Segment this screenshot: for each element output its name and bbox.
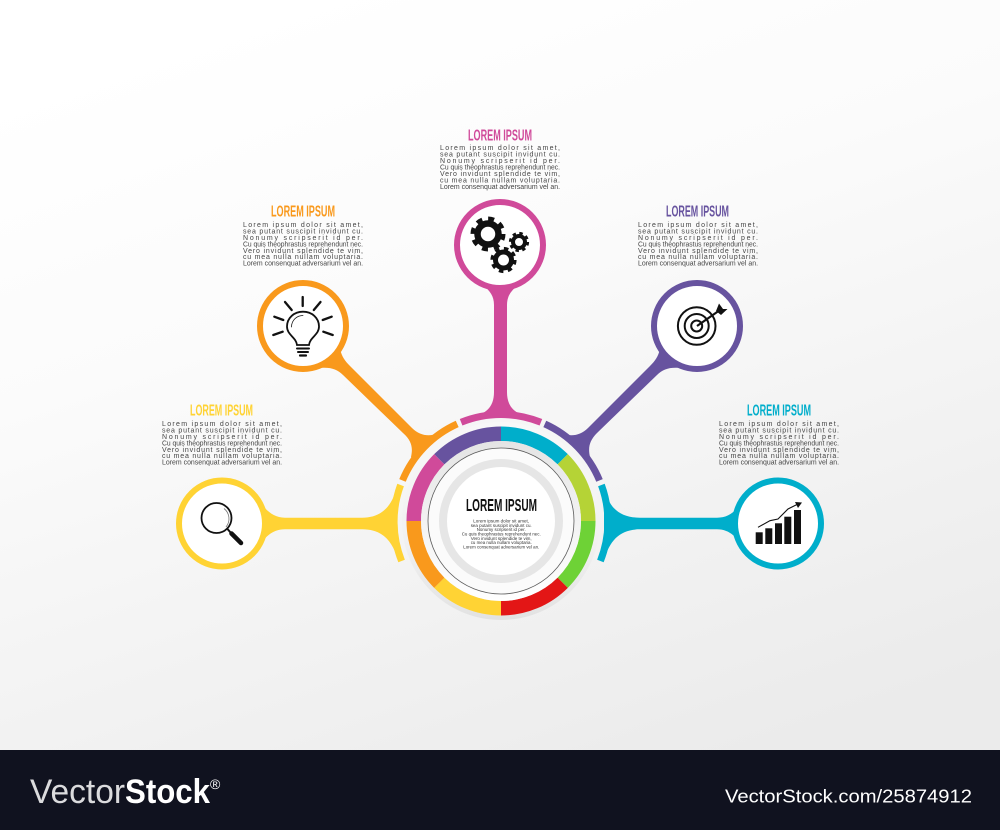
chart arrow [758,502,802,527]
heading: orange: LOREM IPSUM [271,204,335,220]
node circle: yellow [179,480,265,566]
hub outer disc [402,422,600,620]
text block: yellow: Lorem ipsum dolor sit amet, [162,421,282,428]
hub body text: Lorem consenquat adversarium vel an. [463,544,539,549]
text block: blue: cu mea nulla nullam voluptaria. [719,453,839,460]
text block: purple: Lorem consenquat adversarium vel an. [638,261,758,268]
text block: magenta: Lorem consenquat adversarium vel an. [440,184,560,191]
text block: blue: Lorem ipsum dolor sit amet, [719,421,839,428]
footer logo: ® [210,776,221,792]
text block: blue: sea putant suscipit invidunt cu. [719,427,839,434]
text block: magenta: Lorem ipsum dolor sit amet, [440,145,560,152]
text block: blue [719,421,839,467]
footer bar [0,750,1000,830]
icon: gears [472,218,528,272]
hub body text: Nonumy scripserit id per. [477,527,526,532]
connector: orange [320,349,457,480]
text block: blue: Lorem consenquat adversarium vel an. [719,460,839,467]
text block: purple: Vero invidunt splendide te vim, [638,248,758,255]
text block: orange: sea putant suscipit invidunt cu. [243,228,363,235]
panel: step 4 target [545,204,758,480]
panel: step 5 growth [600,402,839,566]
text block: orange: Cu quis theophrastus reprehendunt nec. [243,241,363,248]
text block: magenta: sea putant suscipit invidunt cu. [440,152,560,159]
text block: yellow: sea putant suscipit invidunt cu. [162,427,282,434]
hub body text: Cu quis theophrastus reprehendunt nec. [462,532,541,536]
hub heading: LOREM IPSUM [466,495,537,515]
node circle: purple [654,283,740,369]
text block: yellow: cu mea nulla nullam voluptaria. [162,453,282,460]
hub body text [462,519,541,549]
text block: orange: cu mea nulla nullam voluptaria. [243,254,363,261]
icon: magnifier [202,503,241,543]
text block: orange [243,222,363,268]
text block: purple: cu mea nulla nullam voluptaria. [638,254,758,261]
hub body text: Lorem ipsum dolor sit amet, [473,519,529,524]
text block: yellow: Vero invidunt splendide te vim, [162,447,282,454]
text block: purple [638,222,758,268]
text block: blue: Cu quis theophrastus reprehendunt nec. [719,440,839,447]
text block: yellow: Lorem consenquat adversarium vel an. [162,460,282,467]
panel: step 2 idea [243,204,457,480]
text block: orange: Vero invidunt splendide te vim, [243,248,363,255]
text block: purple: sea putant suscipit invidunt cu. [638,228,758,235]
hub inner disc [421,441,581,601]
connector: yellow [258,485,402,561]
hub white face [428,448,574,594]
text block: magenta: Cu quis theophrastus reprehendunt nec. [440,164,560,172]
icon: growth chart [756,502,802,544]
panel: step 1 search [162,402,402,566]
icon: target [678,304,728,345]
hub grey band [443,463,559,579]
hub body text: cu mea nulla nullam voluptaria. [471,540,532,545]
connector: purple [545,349,680,480]
hub colour ring [414,434,588,608]
text block: magenta: cu mea nulla nullam voluptaria. [440,177,560,184]
connector: magenta [461,285,541,422]
hub body text: Vero invidunt splendide te vim, [471,536,532,541]
text block: orange: Nonumy scripserit id per. [243,235,363,242]
footer id: VectorStock.com/25874912 [725,786,972,806]
heading: yellow: LOREM IPSUM [190,402,253,420]
chart bars [756,510,801,544]
hub body text: sea putant suscipit invidunt cu. [471,523,532,528]
text block: yellow: Cu quis theophrastus reprehendunt nec. [162,440,282,447]
text block: yellow [162,421,282,467]
heading: blue: LOREM IPSUM [747,402,811,420]
text block: yellow: Nonumy scripserit id per. [162,434,282,441]
text block: blue: Nonumy scripserit id per. [719,434,839,441]
connector: blue [600,485,745,561]
text block: magenta: Vero invidunt splendide te vim, [440,171,560,178]
text block: magenta [440,145,560,191]
text block: purple: Nonumy scripserit id per. [638,235,758,242]
panel: central hub [402,422,600,620]
text block: orange: Lorem ipsum dolor sit amet, [243,222,363,229]
node circle: orange [260,283,346,369]
heading: purple: LOREM IPSUM [666,204,729,220]
text block: purple: Cu quis theophrastus reprehendunt nec. [638,241,758,248]
text block: orange: Lorem consenquat adversarium vel an. [243,261,363,268]
footer logo: VectorStock [30,773,218,811]
panel: step 3 settings [440,128,560,422]
text block: blue: Vero invidunt splendide te vim, [719,447,839,454]
text block: magenta: Nonumy scripserit id per. [440,158,560,165]
icon: light bulb [273,297,333,356]
node circle: blue [735,480,821,566]
text block: purple: Lorem ipsum dolor sit amet, [638,222,758,229]
heading: magenta: LOREM IPSUM [468,128,532,144]
footer background [0,750,1000,830]
node circle: magenta [457,202,543,288]
